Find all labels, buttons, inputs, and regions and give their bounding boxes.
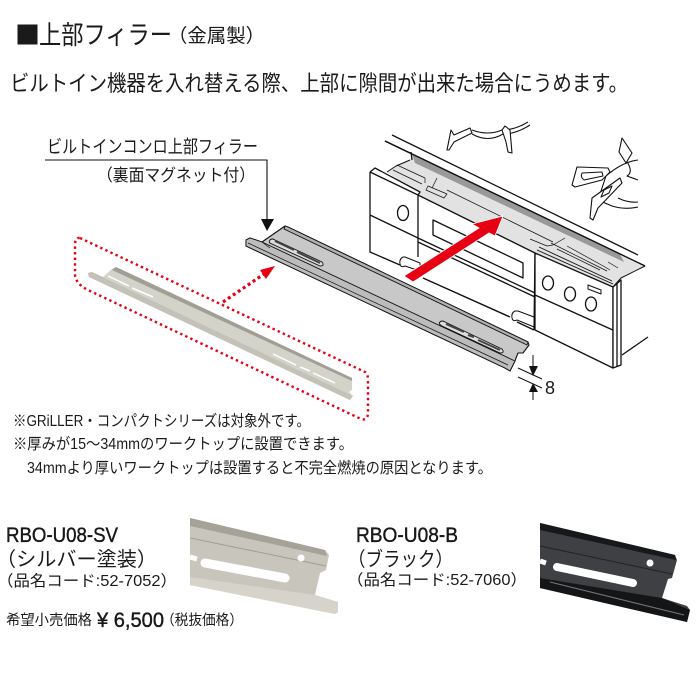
dimension arrow down <box>529 366 538 376</box>
leader arrowhead <box>261 219 274 231</box>
title: （金属製） <box>168 25 265 47</box>
price: ¥ 6,500 <box>96 609 164 632</box>
black rail highlight <box>550 582 684 615</box>
recess outer edge <box>387 160 645 287</box>
right panel <box>535 253 615 368</box>
black hole <box>646 560 654 566</box>
filler slot right inner <box>446 324 500 350</box>
black slot <box>557 567 633 583</box>
photo slots <box>108 276 335 383</box>
icon: right knobs <box>542 276 601 311</box>
red arrow <box>404 216 503 282</box>
black crease <box>540 546 672 574</box>
silver top lip <box>190 518 327 556</box>
icon: right roller <box>512 311 534 327</box>
silver crease <box>190 538 326 566</box>
price <box>6 609 243 632</box>
product: black: （品名コード:52-7060） <box>347 571 527 589</box>
silver slot <box>205 563 285 578</box>
filler bar drawing <box>246 226 529 371</box>
black top lip <box>540 523 676 560</box>
right panel top band <box>537 247 613 284</box>
product: silver <box>0 524 177 590</box>
icon: left burner grate <box>447 122 530 153</box>
leader line and label <box>45 137 274 231</box>
dimension: 8 <box>518 355 555 400</box>
dotted red arrow <box>223 266 275 302</box>
title <box>15 16 265 52</box>
icon: left knob <box>398 206 408 220</box>
dimension arrow up <box>529 383 538 392</box>
product: black <box>347 524 527 589</box>
notes: ※厚みが15～34mmのワークトップに設置できます。 <box>13 435 353 453</box>
lower centre edge <box>423 278 534 330</box>
cabinet side edge <box>613 280 648 368</box>
leader label: ビルトインコンロ上部フィラー <box>47 137 258 157</box>
illustration: built-in cooktop <box>370 122 648 368</box>
notes: ※GRiLLER・コンパクトシリーズは対象外です。 <box>13 412 310 430</box>
filler rail <box>246 238 515 371</box>
photo top shade <box>112 267 352 381</box>
silver rail <box>190 577 338 614</box>
product: silver: （品名コード:52-7052） <box>0 572 177 590</box>
arrowhead <box>260 266 275 279</box>
dimension value: 8 <box>545 378 555 398</box>
product: silver: RBO-U08-SV <box>6 524 118 547</box>
notes <box>13 412 492 477</box>
product: silver: （シルバー塗装） <box>0 548 157 571</box>
dotted red outline <box>75 238 368 419</box>
icon: left roller <box>400 257 420 271</box>
product photo: silver <box>190 518 338 614</box>
filler slot left inner <box>275 241 320 263</box>
black slot partial <box>540 561 546 563</box>
silver filler photo <box>88 267 353 400</box>
filler slot right <box>439 321 503 353</box>
filler body <box>246 226 529 371</box>
silver slot partial <box>190 557 197 559</box>
filler top band <box>284 226 528 345</box>
recess slots <box>393 165 618 271</box>
product photo: black <box>540 523 690 622</box>
intro text: ビルトイン機器を入れ替える際、上部に隙間が出来た場合にうめます。 <box>10 71 628 96</box>
photo rod <box>88 272 353 400</box>
product: black: （ブラック） <box>348 547 453 571</box>
price: （税抜価格） <box>161 612 243 629</box>
price: 希望小売価格 <box>6 612 92 629</box>
notes: 34mmより厚いワークトップは設置すると不完全燃焼の原因となります。 <box>27 459 492 477</box>
left panel <box>370 168 420 265</box>
icon: right burner grate <box>572 138 638 220</box>
filler recess: light panel <box>387 154 645 287</box>
title: ■ <box>15 16 40 52</box>
grill window <box>433 220 523 278</box>
filler slot left <box>269 239 323 266</box>
title: 上部フィラー <box>39 20 172 50</box>
black rail <box>540 578 690 622</box>
product: black: RBO-U08-B <box>356 524 458 547</box>
worktop edge lines <box>385 135 645 266</box>
filler recess: dark strip <box>412 154 624 262</box>
leader sublabel: （裏面マグネット付） <box>97 166 255 185</box>
filler rail line <box>248 242 508 365</box>
silver hole <box>298 554 304 562</box>
recess top edge <box>385 141 645 266</box>
centre panel lines <box>418 195 535 330</box>
